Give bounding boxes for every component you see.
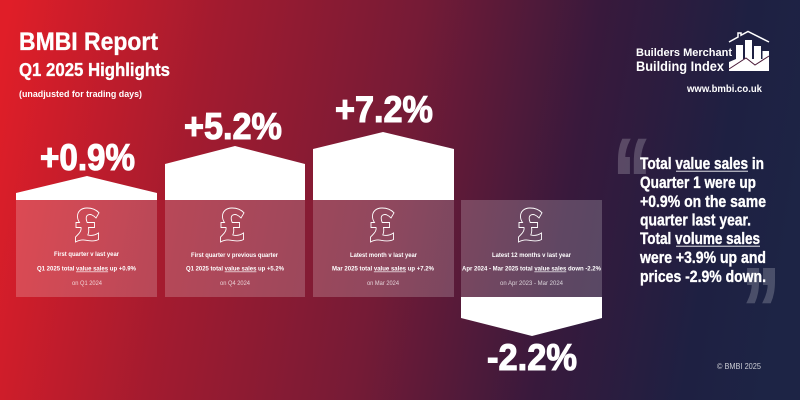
- panel heading: Latest 12 months v last year: [492, 252, 571, 259]
- logo wordmark second line: Building Index: [636, 59, 724, 74]
- logo wordmark: Builders Merchant: [636, 47, 732, 59]
- up arrow: [16, 176, 157, 200]
- value +0.9%: +0.9%: [40, 137, 135, 178]
- title: BMBI Report: [19, 28, 159, 56]
- panel: [165, 200, 305, 297]
- icon: pound sign: [220, 208, 244, 242]
- quote text: were +3.9% up and: [639, 248, 766, 267]
- title block: [19, 28, 170, 100]
- up arrow: [313, 132, 454, 200]
- quote text: Total volume sales: [640, 229, 760, 248]
- column 3: latest month v last year: [313, 89, 454, 297]
- column 4: latest 12 months v last year: [461, 200, 602, 378]
- panel: [16, 200, 157, 297]
- panel detail: Q1 2025 total value sales up +5.2%: [186, 266, 284, 272]
- quote text: prices -2.9% down.: [640, 267, 766, 286]
- quote text: [639, 154, 766, 286]
- icon: pound sign: [370, 208, 394, 242]
- logo icon: house and buildings: [729, 32, 769, 71]
- quote text: +0.9% on the same: [640, 192, 766, 211]
- panel: [313, 200, 454, 297]
- panel detail: Apr 2024 - Mar 2025 total value sales down -2.2%: [462, 266, 601, 272]
- copyright: © BMBI 2025: [717, 362, 762, 371]
- panel comparison: on Apr 2023 - Mar 2024: [500, 280, 563, 287]
- subtitle: Q1 2025 Highlights: [19, 59, 170, 80]
- panel comparison: on Q1 2024: [72, 280, 102, 287]
- note: (unadjusted for trading days): [19, 89, 142, 100]
- down arrow: [461, 297, 602, 336]
- column 2: first quarter v previous quarter: [165, 106, 305, 297]
- panel comparison: on Mar 2024: [367, 280, 399, 287]
- panel: [461, 200, 602, 297]
- panel detail: Mar 2025 total value sales up +7.2%: [332, 266, 434, 272]
- column 1: first quarter v last year: [16, 137, 157, 297]
- value +5.2%: +5.2%: [184, 106, 282, 147]
- panel heading: Latest month v last year: [350, 252, 417, 259]
- closing quote mark: ”: [742, 244, 780, 376]
- quote text: Total value sales in: [640, 154, 764, 173]
- quote text: Quarter 1 were up: [640, 173, 756, 192]
- panel heading: First quarter v last year: [54, 251, 119, 258]
- website url: www.bmbi.co.uk: [686, 83, 762, 95]
- logo: Builders Merchant Building Index: [636, 32, 769, 95]
- value -2.2%: -2.2%: [487, 337, 577, 378]
- up arrow: [165, 146, 305, 200]
- panel comparison: on Q4 2024: [220, 280, 250, 287]
- panel heading: First quarter v previous quarter: [191, 252, 278, 259]
- icon: pound sign: [76, 208, 99, 242]
- opening quote mark: “: [613, 115, 651, 247]
- icon: pound sign: [518, 208, 542, 242]
- panel detail: Q1 2025 total value sales up +0.9%: [37, 266, 136, 272]
- value +7.2%: +7.2%: [335, 89, 433, 130]
- quote text: quarter last year.: [640, 210, 751, 230]
